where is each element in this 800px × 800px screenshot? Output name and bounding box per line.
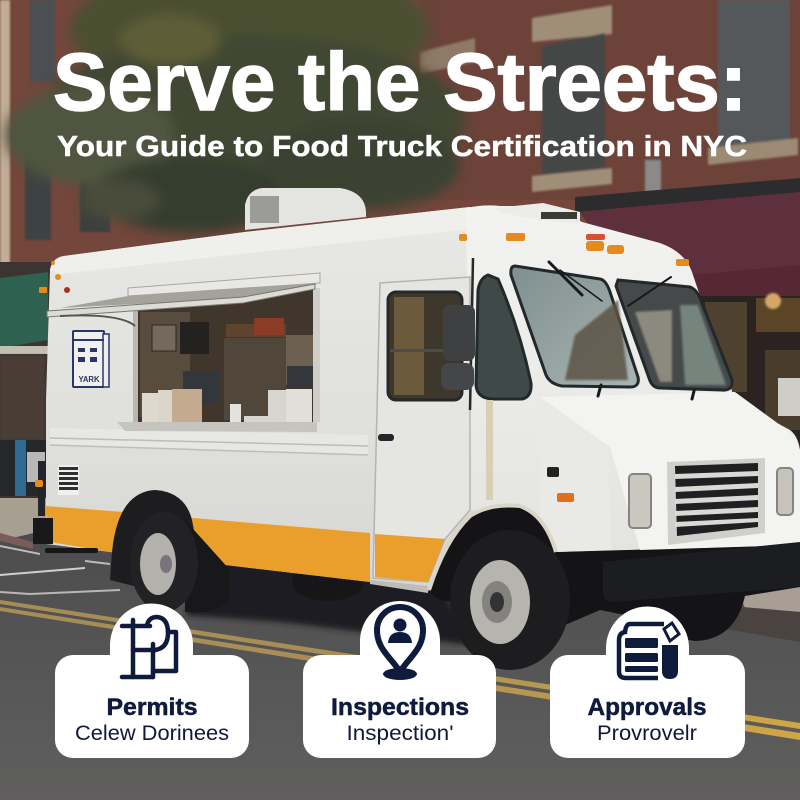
front wheel [450, 530, 570, 670]
roof vent [495, 203, 580, 224]
rear arch [110, 490, 200, 590]
rear wheel [130, 512, 230, 612]
storefront left [0, 262, 52, 502]
label: permits: Permits [106, 694, 198, 721]
food truck [33, 188, 800, 670]
grille [667, 458, 765, 545]
front arch [428, 505, 570, 620]
icon: location pin [377, 607, 423, 680]
windshield left [511, 266, 638, 387]
front bumper [603, 542, 800, 602]
wipers [549, 262, 694, 399]
body side button [547, 467, 559, 477]
storefront right [575, 180, 800, 300]
card: approvals [550, 606, 745, 758]
awning [47, 273, 320, 326]
pillar stripe [486, 400, 493, 500]
sublabel: inspections: Inspection' [346, 722, 454, 745]
rear vent [58, 465, 79, 495]
rear lights and bumper [33, 461, 98, 553]
subtitle: Your Guide to Food Truck Certification in NYC [57, 131, 747, 163]
label: inspections: Inspections [331, 694, 469, 721]
card: inspections [303, 601, 496, 758]
far front wheel and under-cab [556, 540, 800, 641]
hood [540, 392, 800, 550]
icon: document with tag [619, 623, 679, 679]
title: Serve the Streets: [53, 37, 747, 128]
road lines [0, 545, 40, 555]
rooftop AC unit [245, 188, 366, 230]
truck body box [46, 207, 500, 592]
curb [0, 533, 33, 549]
door [373, 277, 470, 582]
mirrors [441, 258, 475, 410]
sill [370, 580, 428, 593]
card: permits [55, 603, 249, 758]
headlights [629, 468, 793, 528]
yellow lower stripe [45, 506, 370, 582]
icon: permits [122, 617, 176, 677]
truck logo [73, 331, 109, 387]
body moulding [50, 428, 368, 455]
side window [476, 275, 531, 399]
sidewalks [0, 498, 50, 548]
tree [5, 0, 465, 233]
truck logo: YARK [78, 375, 100, 384]
road [0, 530, 800, 800]
under-truck shadow [185, 556, 470, 645]
arch flange [429, 505, 556, 590]
cab [466, 205, 800, 552]
far rear wheel [292, 563, 364, 601]
roof panel [50, 207, 478, 274]
sublabel: permits: Celew Dorinees [75, 722, 229, 745]
marker lights [39, 233, 689, 502]
sublabel: approvals: Provrovelr [597, 722, 697, 745]
label: approvals: Approvals [588, 694, 706, 721]
serving window [117, 288, 320, 432]
windshield right [616, 280, 732, 390]
building windows [25, 0, 798, 240]
door stripe [375, 534, 445, 582]
